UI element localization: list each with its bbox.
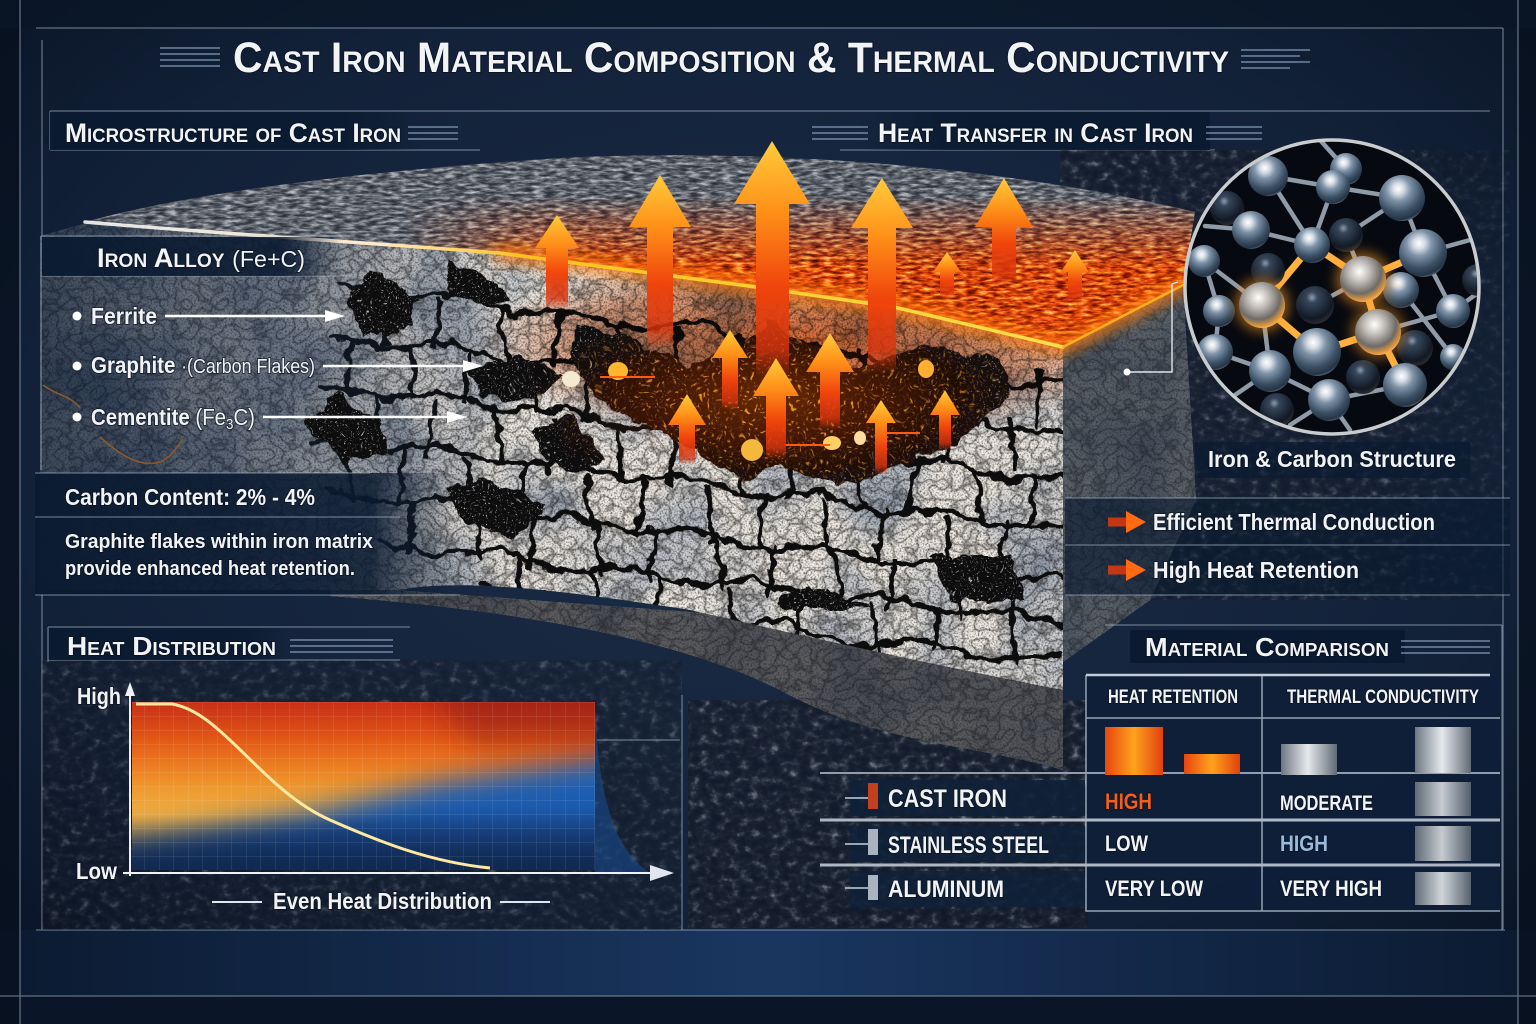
steel atoms — [1188, 153, 1470, 421]
section heading: heat transfer: Heat Transfer in Cast Iron — [878, 118, 1193, 148]
row: cast iron: MODERATE — [1280, 792, 1373, 815]
arrow 6 — [933, 252, 961, 298]
row: aluminum: VERY LOW — [1105, 876, 1203, 901]
cast iron block — [40, 145, 1200, 780]
item: cementite: C) — [233, 404, 255, 430]
item: graphite — [72, 352, 483, 378]
row: cast iron — [845, 783, 1373, 815]
row: stainless steel — [845, 829, 1328, 859]
row: aluminum: VERY HIGH — [1280, 876, 1382, 901]
gray bonds — [1204, 140, 1482, 430]
column header: thermal conductivity: THERMAL CONDUCTIVITY — [1287, 686, 1479, 708]
item: cementite: Cementite (Fe — [91, 404, 230, 430]
heat arrows — [535, 141, 1089, 475]
row: aluminum: ALUMINUM — [888, 876, 1004, 903]
panel: molecular structure — [1124, 140, 1494, 478]
panel: heat transfer properties — [1065, 498, 1510, 595]
panel heading: Heat Distribution — [67, 631, 276, 661]
arrow 7 — [1061, 250, 1089, 302]
arrow 1 — [535, 215, 579, 310]
axis label low: Low — [76, 858, 117, 884]
arrow 5 — [975, 178, 1033, 285]
arrow 9 — [806, 333, 854, 430]
row labels band — [850, 780, 1085, 816]
panel heading: Iron Alloy (Fe+C) — [97, 243, 305, 273]
column header: heat retention: HEAT RETENTION — [1108, 686, 1238, 708]
chart — [76, 670, 674, 914]
molecule caption — [1195, 442, 1470, 478]
heated edge — [85, 222, 1183, 347]
gold bonds — [1274, 252, 1403, 368]
heat retention bars — [1105, 727, 1240, 775]
panel: material comparison — [820, 625, 1502, 930]
lower middle rock texture — [688, 700, 1088, 928]
arrow 11 — [668, 394, 706, 465]
arrow 2 — [629, 175, 691, 350]
section heading: microstructure — [50, 112, 458, 150]
conductivity bars — [1281, 727, 1471, 905]
glowing nuggets — [562, 360, 934, 461]
arrow 12 — [866, 400, 896, 475]
connector — [1127, 282, 1178, 372]
item: ferrite: Ferrite — [91, 303, 157, 329]
comparison table — [820, 675, 1500, 911]
graphite patches — [300, 250, 1070, 610]
block side face — [1060, 280, 1200, 670]
carbon content note: provide enhanced heat retention. — [65, 557, 355, 580]
panel: carbon content — [35, 473, 460, 595]
panel: heat distribution — [48, 627, 682, 930]
dark atoms — [1210, 191, 1494, 427]
block front face — [40, 220, 1140, 700]
title text: Cast Iron Material Composition & Thermal Conductivity — [233, 34, 1229, 82]
axis caption: Even Heat Distribution — [273, 888, 492, 914]
right rock texture — [1060, 150, 1510, 600]
item: cementite — [72, 404, 467, 433]
crack network — [310, 285, 1063, 664]
glowing atoms — [1235, 252, 1405, 359]
carbon content note: Graphite flakes within iron matrix — [65, 530, 374, 553]
panel heading: Material Comparison — [1145, 632, 1389, 662]
title left stripes — [160, 48, 220, 66]
molecule caption: Iron & Carbon Structure — [1208, 446, 1456, 472]
axis label high: High — [77, 683, 121, 709]
property: efficient conduction: Efficient Thermal Conduction — [1153, 509, 1435, 535]
row: stainless steel: STAINLESS STEEL — [888, 832, 1049, 859]
property: heat retention: High Heat Retention — [1153, 557, 1359, 583]
panel: iron alloy — [41, 236, 483, 470]
arrow 10 — [753, 358, 799, 460]
rust veins — [43, 385, 182, 463]
heat curve — [136, 704, 490, 868]
block top surface — [80, 145, 1200, 350]
lower left rock texture — [42, 660, 682, 930]
molecule circle — [1185, 140, 1494, 434]
title — [160, 34, 1310, 82]
row: stainless steel: LOW — [1105, 831, 1148, 856]
item: cementite: 3 — [226, 416, 233, 433]
row: aluminum — [845, 875, 1382, 903]
arrow 8 — [712, 330, 748, 410]
title right stripes — [1241, 50, 1310, 68]
item: ferrite — [72, 303, 345, 329]
row: stainless steel: HIGH — [1280, 831, 1328, 856]
row: cast iron: HIGH — [1105, 789, 1152, 814]
item: graphite: Graphite ·(Carbon Flakes) — [91, 352, 315, 378]
section heading: microstructure: Microstructure of Cast Iron — [65, 118, 401, 148]
arrow 3 — [734, 141, 810, 378]
axes — [123, 690, 655, 876]
row: cast iron: CAST IRON — [888, 785, 1007, 813]
arrow 4 — [851, 178, 913, 373]
block underside — [330, 590, 1063, 770]
arrow 13 — [930, 390, 960, 450]
carbon content value: Carbon Content: 2% - 4% — [65, 484, 315, 510]
section heading: heat transfer — [812, 112, 1262, 150]
